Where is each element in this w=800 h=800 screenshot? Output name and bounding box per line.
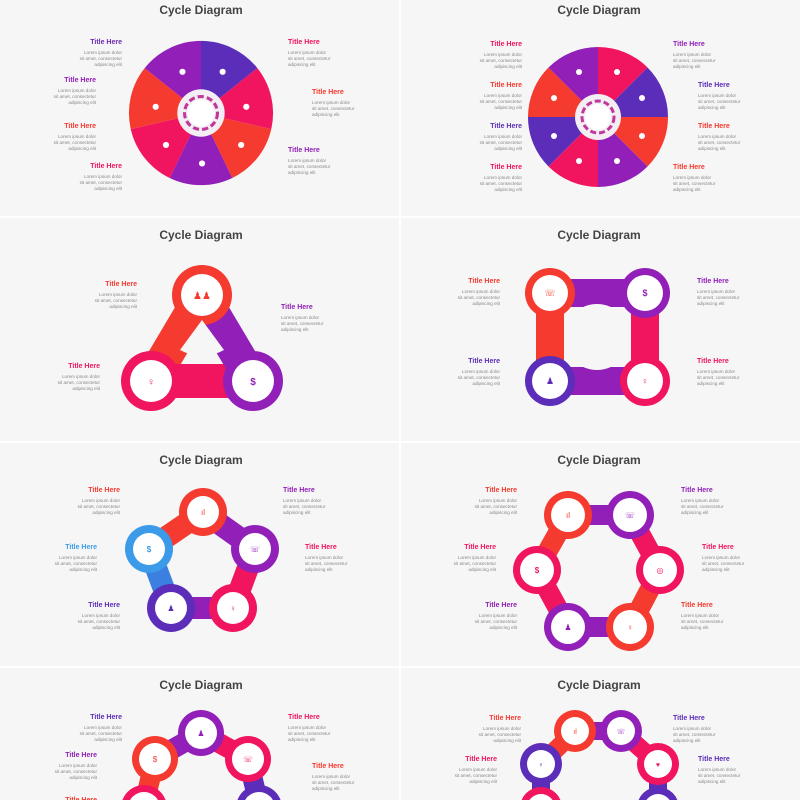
- panel: slide 3 triangle cycle: [58, 228, 324, 411]
- panel: slide 7 seven-node cycle (cropped): [55, 678, 355, 800]
- panel: slide 6 six-node cycle: [454, 453, 745, 651]
- title: Cycle Diagram: [557, 453, 641, 467]
- cycle chart: ☏: [625, 511, 635, 520]
- cycle chart: $: [642, 288, 648, 298]
- labels: [95, 281, 138, 309]
- cycle chart: ♟: [564, 623, 572, 632]
- labels: [78, 487, 121, 515]
- cycle chart: ♥: [656, 762, 660, 769]
- cycle chart: ♀: [642, 376, 648, 386]
- cycle chart: ◎: [657, 566, 664, 575]
- cycle chart: [525, 268, 670, 406]
- title: Cycle Diagram: [159, 3, 243, 17]
- cycle chart: ıl: [573, 729, 577, 736]
- cycle chart: ♟♟: [193, 291, 211, 302]
- panel: slide 8 eight-node cycle (cropped): [455, 678, 741, 800]
- pie chart: [129, 41, 273, 185]
- title: Cycle Diagram: [159, 453, 243, 467]
- panel: slide 5 five-node cycle: [55, 453, 348, 632]
- cycle chart: $: [535, 566, 540, 575]
- cycle chart: [520, 710, 679, 800]
- title: Cycle Diagram: [557, 3, 641, 17]
- cycle chart: ♀: [147, 377, 155, 388]
- panel: slide 1 pie 7: [54, 3, 355, 191]
- panel: slide 4 four-node cycle: [458, 228, 740, 406]
- cycle chart: [125, 488, 279, 632]
- cycle chart: ıl: [201, 508, 205, 517]
- cycle chart: ♀: [627, 623, 633, 632]
- labels: [80, 39, 123, 67]
- labels: [480, 41, 523, 69]
- labels: [80, 714, 123, 742]
- cycle chart: ♀: [230, 604, 236, 613]
- cycle chart: ıl: [566, 511, 570, 520]
- labels: [475, 487, 518, 515]
- cycle chart: $: [250, 377, 256, 388]
- labels: [458, 278, 501, 306]
- cycle chart: ☏: [544, 288, 556, 298]
- cycle chart: ☏: [243, 755, 253, 764]
- title: Cycle Diagram: [159, 678, 243, 692]
- title: Cycle Diagram: [159, 228, 243, 242]
- cycle chart: ♟: [197, 729, 205, 738]
- cycle chart: ☏: [617, 728, 626, 736]
- title: Cycle Diagram: [557, 678, 641, 692]
- title: Cycle Diagram: [557, 228, 641, 242]
- cycle chart: ♟: [546, 376, 554, 386]
- pie chart: [528, 47, 668, 187]
- cycle chart: [121, 710, 282, 800]
- cycle chart: $: [153, 755, 158, 764]
- labels: [479, 715, 522, 743]
- cycle chart: ☏: [250, 545, 260, 554]
- panel: slide 2 pie 8: [480, 3, 741, 192]
- cycle chart: [121, 265, 283, 411]
- cycle chart: [513, 491, 684, 651]
- cycle chart: ♀: [538, 762, 544, 769]
- cycle chart: $: [147, 545, 152, 554]
- cycle chart: ♟: [167, 604, 175, 613]
